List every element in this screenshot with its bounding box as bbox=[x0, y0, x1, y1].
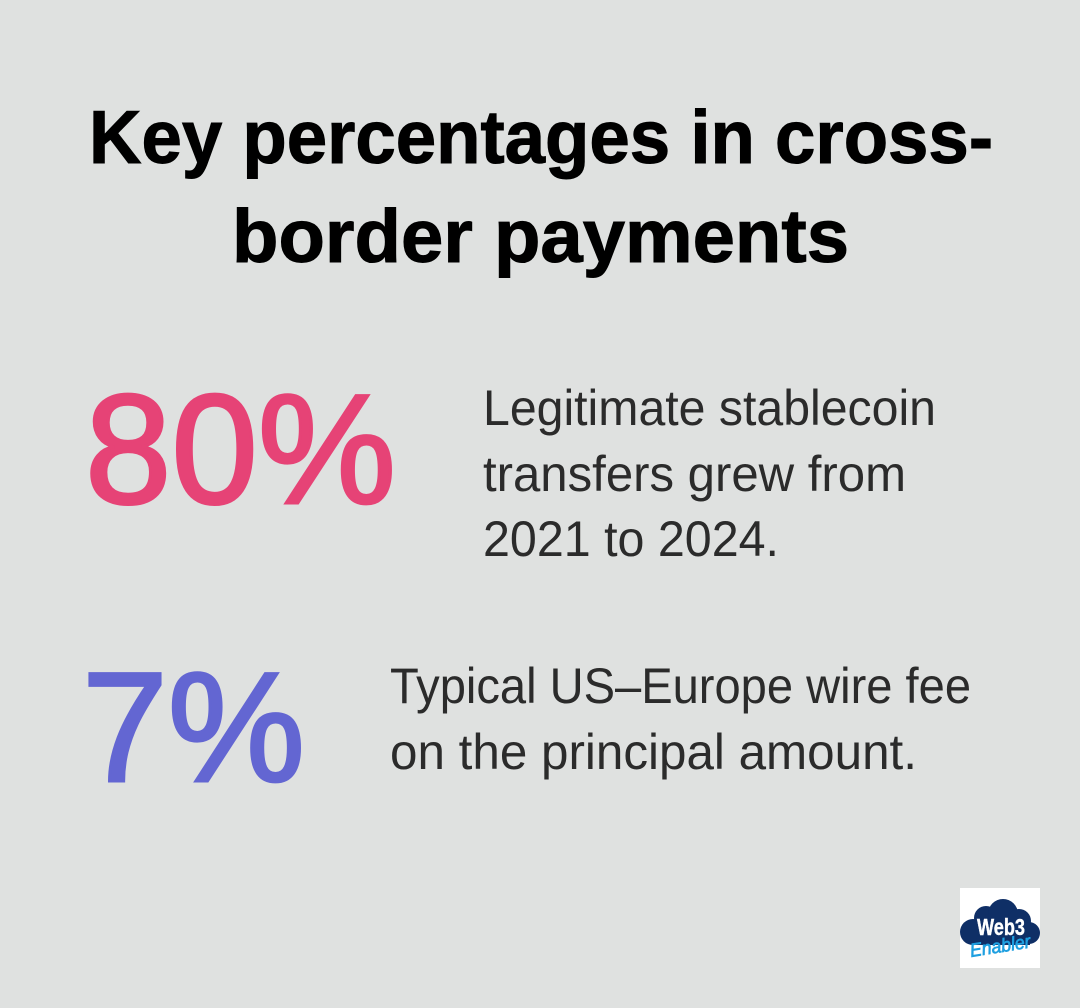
text: wire fee description: Typical US–Europe wire fee bbox=[390, 658, 971, 714]
title bbox=[89, 95, 993, 278]
text: wire fee description bbox=[390, 658, 971, 780]
text: stablecoin description: 2021 to 2024. bbox=[483, 511, 779, 567]
text: stablecoin description: transfers grew from bbox=[483, 446, 906, 502]
title: Key percentages in cross- bbox=[89, 95, 993, 179]
logo: Web3 Enabler bbox=[960, 888, 1040, 968]
stat: 80%: 80% bbox=[85, 363, 396, 537]
text: wire fee description: on the principal amount. bbox=[390, 724, 917, 780]
icon: cloud bbox=[960, 899, 1040, 945]
logo wordmark: Web3: Web3 bbox=[977, 914, 1025, 940]
title: border payments bbox=[232, 194, 849, 278]
logo wordmark: Enabler: Enabler bbox=[968, 932, 1033, 962]
text: stablecoin description: Legitimate stablecoin bbox=[483, 380, 936, 436]
text: stablecoin description bbox=[483, 380, 936, 567]
stat: 7%: 7% bbox=[82, 641, 305, 815]
